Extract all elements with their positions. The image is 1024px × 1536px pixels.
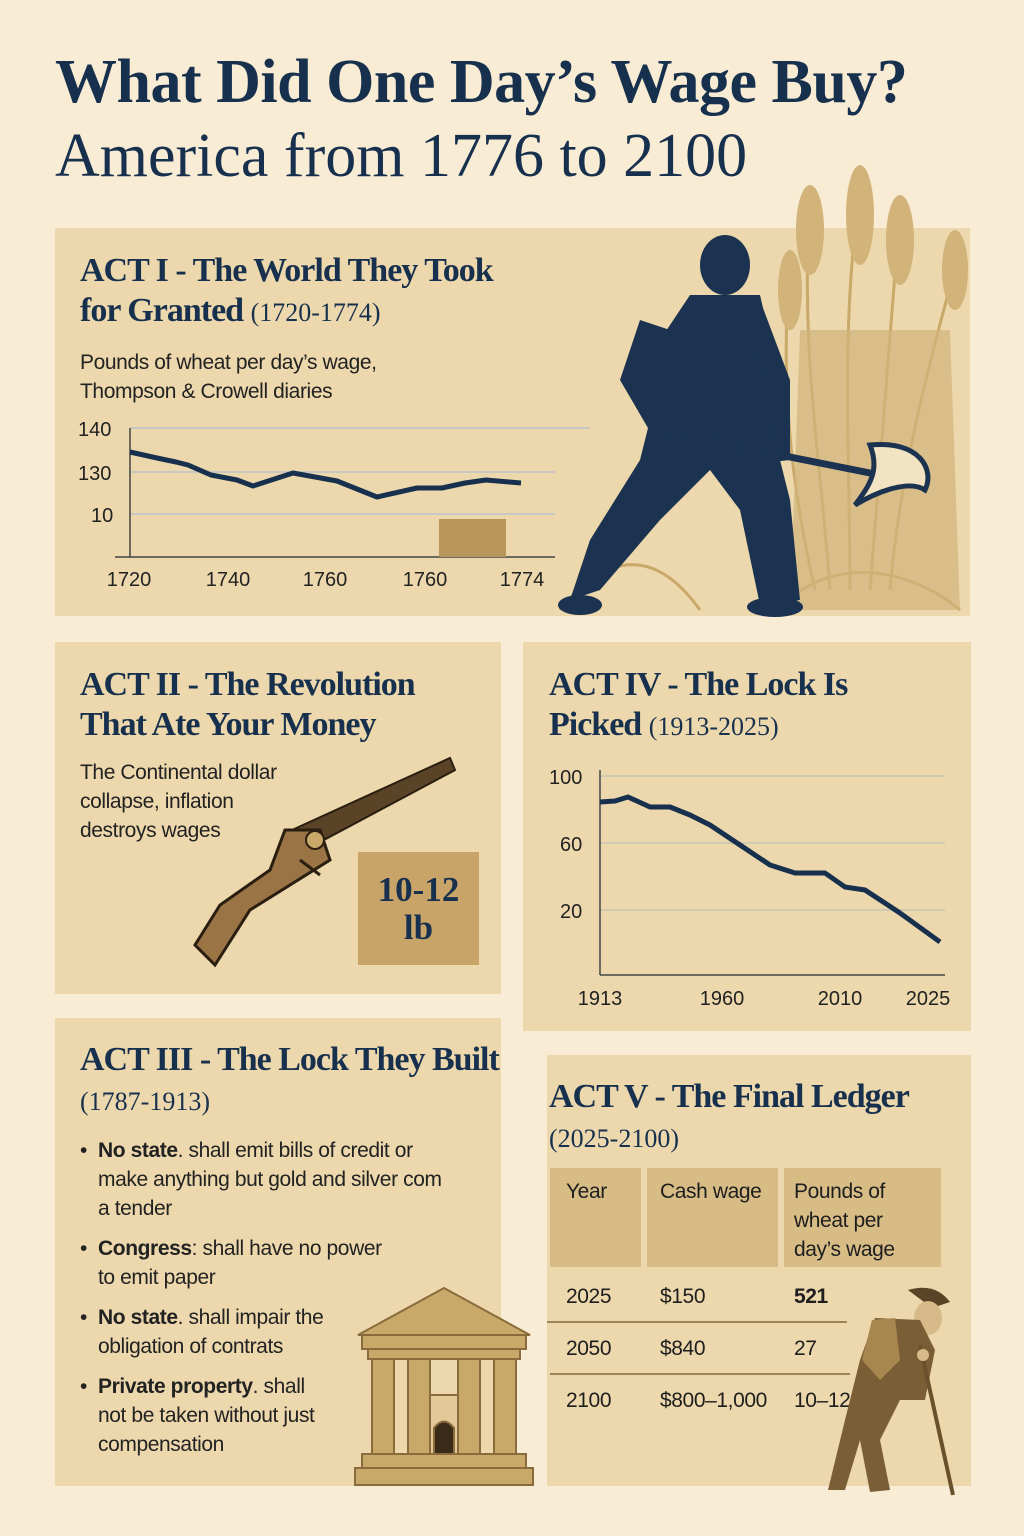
chart: act I line chart: 1774 [500, 569, 544, 591]
table: final ledger: 2025 [566, 1285, 611, 1308]
table: final ledger: wheat per [794, 1209, 883, 1232]
text: act III bullets: No state. shall impair the obligation of contrats [98, 1306, 323, 1358]
icon: farmer with hoe and wheat [558, 165, 968, 617]
title [55, 48, 907, 190]
chart: act IV line chart: 100 [549, 767, 582, 789]
panel: act I [55, 228, 970, 616]
callout: 10-12 lb: lb [404, 908, 433, 946]
panel: act II [55, 642, 501, 994]
chart: act I line chart: 140 [78, 419, 111, 441]
callout: 10-12 lb: 10-12 [378, 870, 459, 908]
table: final ledger: $150 [660, 1285, 705, 1308]
table: final ledger: 27 [794, 1337, 817, 1360]
table: final ledger: 10–12 [794, 1389, 850, 1412]
panel: act IV [523, 642, 971, 1031]
icon: musket [193, 756, 456, 968]
panel: act V [547, 1055, 971, 1486]
chart: act I line chart [78, 419, 590, 591]
callout: 10-12 lb [358, 852, 479, 965]
title line 1: What Did One Day’s Wage Buy? [55, 48, 907, 116]
text: act I subtitle [80, 351, 377, 403]
heading: act I: ACT I - The World They Took for Granted (1720-1774) [80, 252, 493, 329]
table: final ledger: 521 [794, 1285, 828, 1308]
heading: act III: (1787-1913) [80, 1087, 210, 1116]
chart: act I line chart: 10 [91, 505, 113, 527]
chart: act I line chart: 1740 [206, 569, 250, 591]
table: final ledger: Cash wage [660, 1180, 761, 1203]
chart: act I line chart: 1720 [107, 569, 151, 591]
table: final ledger: $800–1,000 [660, 1389, 767, 1412]
heading: act V: ACT V - The Final Ledger [549, 1078, 909, 1115]
heading: act II: ACT II - The Revolution That Ate Your Money [80, 666, 415, 743]
text: act III bullets: Congress: shall have no power to emit paper [98, 1237, 382, 1289]
chart: act I line chart: 1760 [303, 569, 347, 591]
text: act II description: destroys wages [80, 819, 220, 842]
text: act I subtitle: Pounds of wheat per day’s wage, [80, 351, 377, 374]
chart: act IV line chart: 1913 [578, 988, 622, 1010]
heading: act III [80, 1041, 500, 1116]
text: act II description: collapse, inflation [80, 790, 234, 813]
text: act III bullets: • [80, 1375, 87, 1398]
text: act III bullets: • [80, 1139, 87, 1162]
text: act III bullets: • [80, 1306, 87, 1329]
chart: act IV line chart: 1960 [700, 988, 744, 1010]
chart: act IV line chart: 2010 [818, 988, 862, 1010]
panel: act III [55, 1018, 501, 1486]
table: final ledger [547, 1168, 941, 1412]
table: final ledger: day’s wage [794, 1238, 895, 1261]
subtitle: America from 1776 to 2100 [55, 122, 747, 190]
table: final ledger: Year [566, 1180, 607, 1203]
heading: act IV: ACT IV - The Lock Is Picked (1913-2025) [549, 666, 847, 743]
chart: act IV line chart [549, 767, 950, 1010]
heading: act V [549, 1078, 910, 1153]
chart: act IV line chart: 60 [560, 834, 582, 856]
chart: act I line chart: 130 [78, 463, 111, 485]
heading: act III: ACT III - The Lock They Built [80, 1041, 499, 1078]
text: act I subtitle: Thompson & Crowell diaries [80, 380, 332, 403]
text: act II description: The Continental dollar [80, 761, 277, 784]
text: act II description [80, 761, 277, 842]
chart: act IV line chart: 20 [560, 901, 582, 923]
table: final ledger: 2050 [566, 1337, 611, 1360]
table: final ledger: $840 [660, 1337, 705, 1360]
table: final ledger: 2100 [566, 1389, 611, 1412]
text: act III bullets: • [80, 1237, 87, 1260]
heading: act V: (2025-2100) [549, 1124, 679, 1153]
table: final ledger: Pounds of [794, 1180, 885, 1203]
chart: act IV line chart: 2025 [906, 988, 950, 1010]
chart: act I line chart: 1760 [403, 569, 447, 591]
text: act III bullets: Private property. shall not be taken without just compensation [98, 1375, 314, 1456]
text: act III bullets [80, 1139, 442, 1456]
text: act III bullets: No state. shall emit bills of credit or make anything but gold and silver com a tender [98, 1139, 442, 1220]
